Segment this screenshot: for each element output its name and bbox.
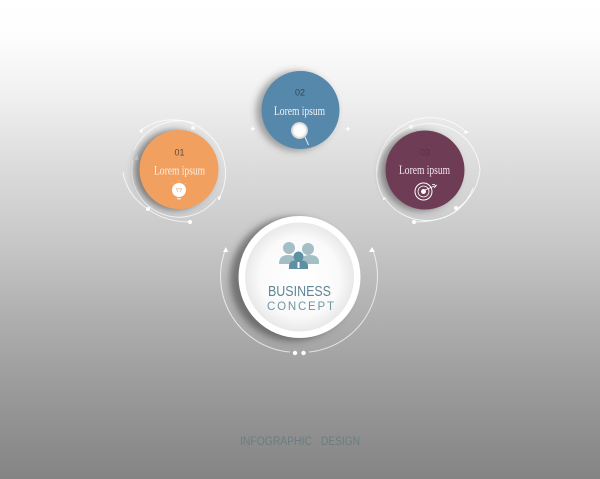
disc: maroon	[386, 130, 464, 210]
panel: orange step 01	[123, 120, 225, 224]
arc arrows: center	[221, 247, 377, 355]
number: 02: 02	[295, 88, 305, 98]
outer ring	[238, 216, 360, 338]
icon: target	[415, 183, 437, 200]
heading: CONCEPT: CONCEPT	[267, 301, 334, 313]
shadow: center	[230, 217, 354, 341]
shadow: blue	[256, 71, 336, 151]
disc: blue	[262, 71, 340, 149]
label: Lorem ipsum maroon: Lorem ipsum	[399, 163, 450, 177]
sparkle markers: blue	[250, 126, 351, 132]
heading: BUSINESS: BUSINESS	[268, 284, 331, 300]
icon: business people	[279, 242, 319, 269]
panel: maroon step 03	[376, 118, 480, 224]
icon: magnifying glass	[291, 122, 308, 145]
shadow: maroon	[380, 131, 460, 211]
orbit rings: orange	[123, 120, 225, 224]
inner disc	[245, 222, 354, 332]
number: 01: 01	[174, 148, 185, 158]
panel: blue step 02	[250, 71, 351, 151]
disc: orange	[140, 130, 218, 209]
footer: infographic design: INFOGRAPHIC	[240, 436, 312, 448]
label: Lorem ipsum blue: Lorem ipsum	[274, 104, 325, 118]
number: 03: 03	[420, 148, 430, 158]
footer: infographic design: DESIGN	[321, 436, 360, 448]
icon: light bulb	[172, 180, 186, 200]
label: Lorem ipsum orange: Lorem ipsum	[154, 164, 205, 178]
panel: central business concept	[221, 216, 377, 355]
orbit rings: maroon	[376, 118, 480, 224]
shadow: orange	[134, 130, 214, 210]
